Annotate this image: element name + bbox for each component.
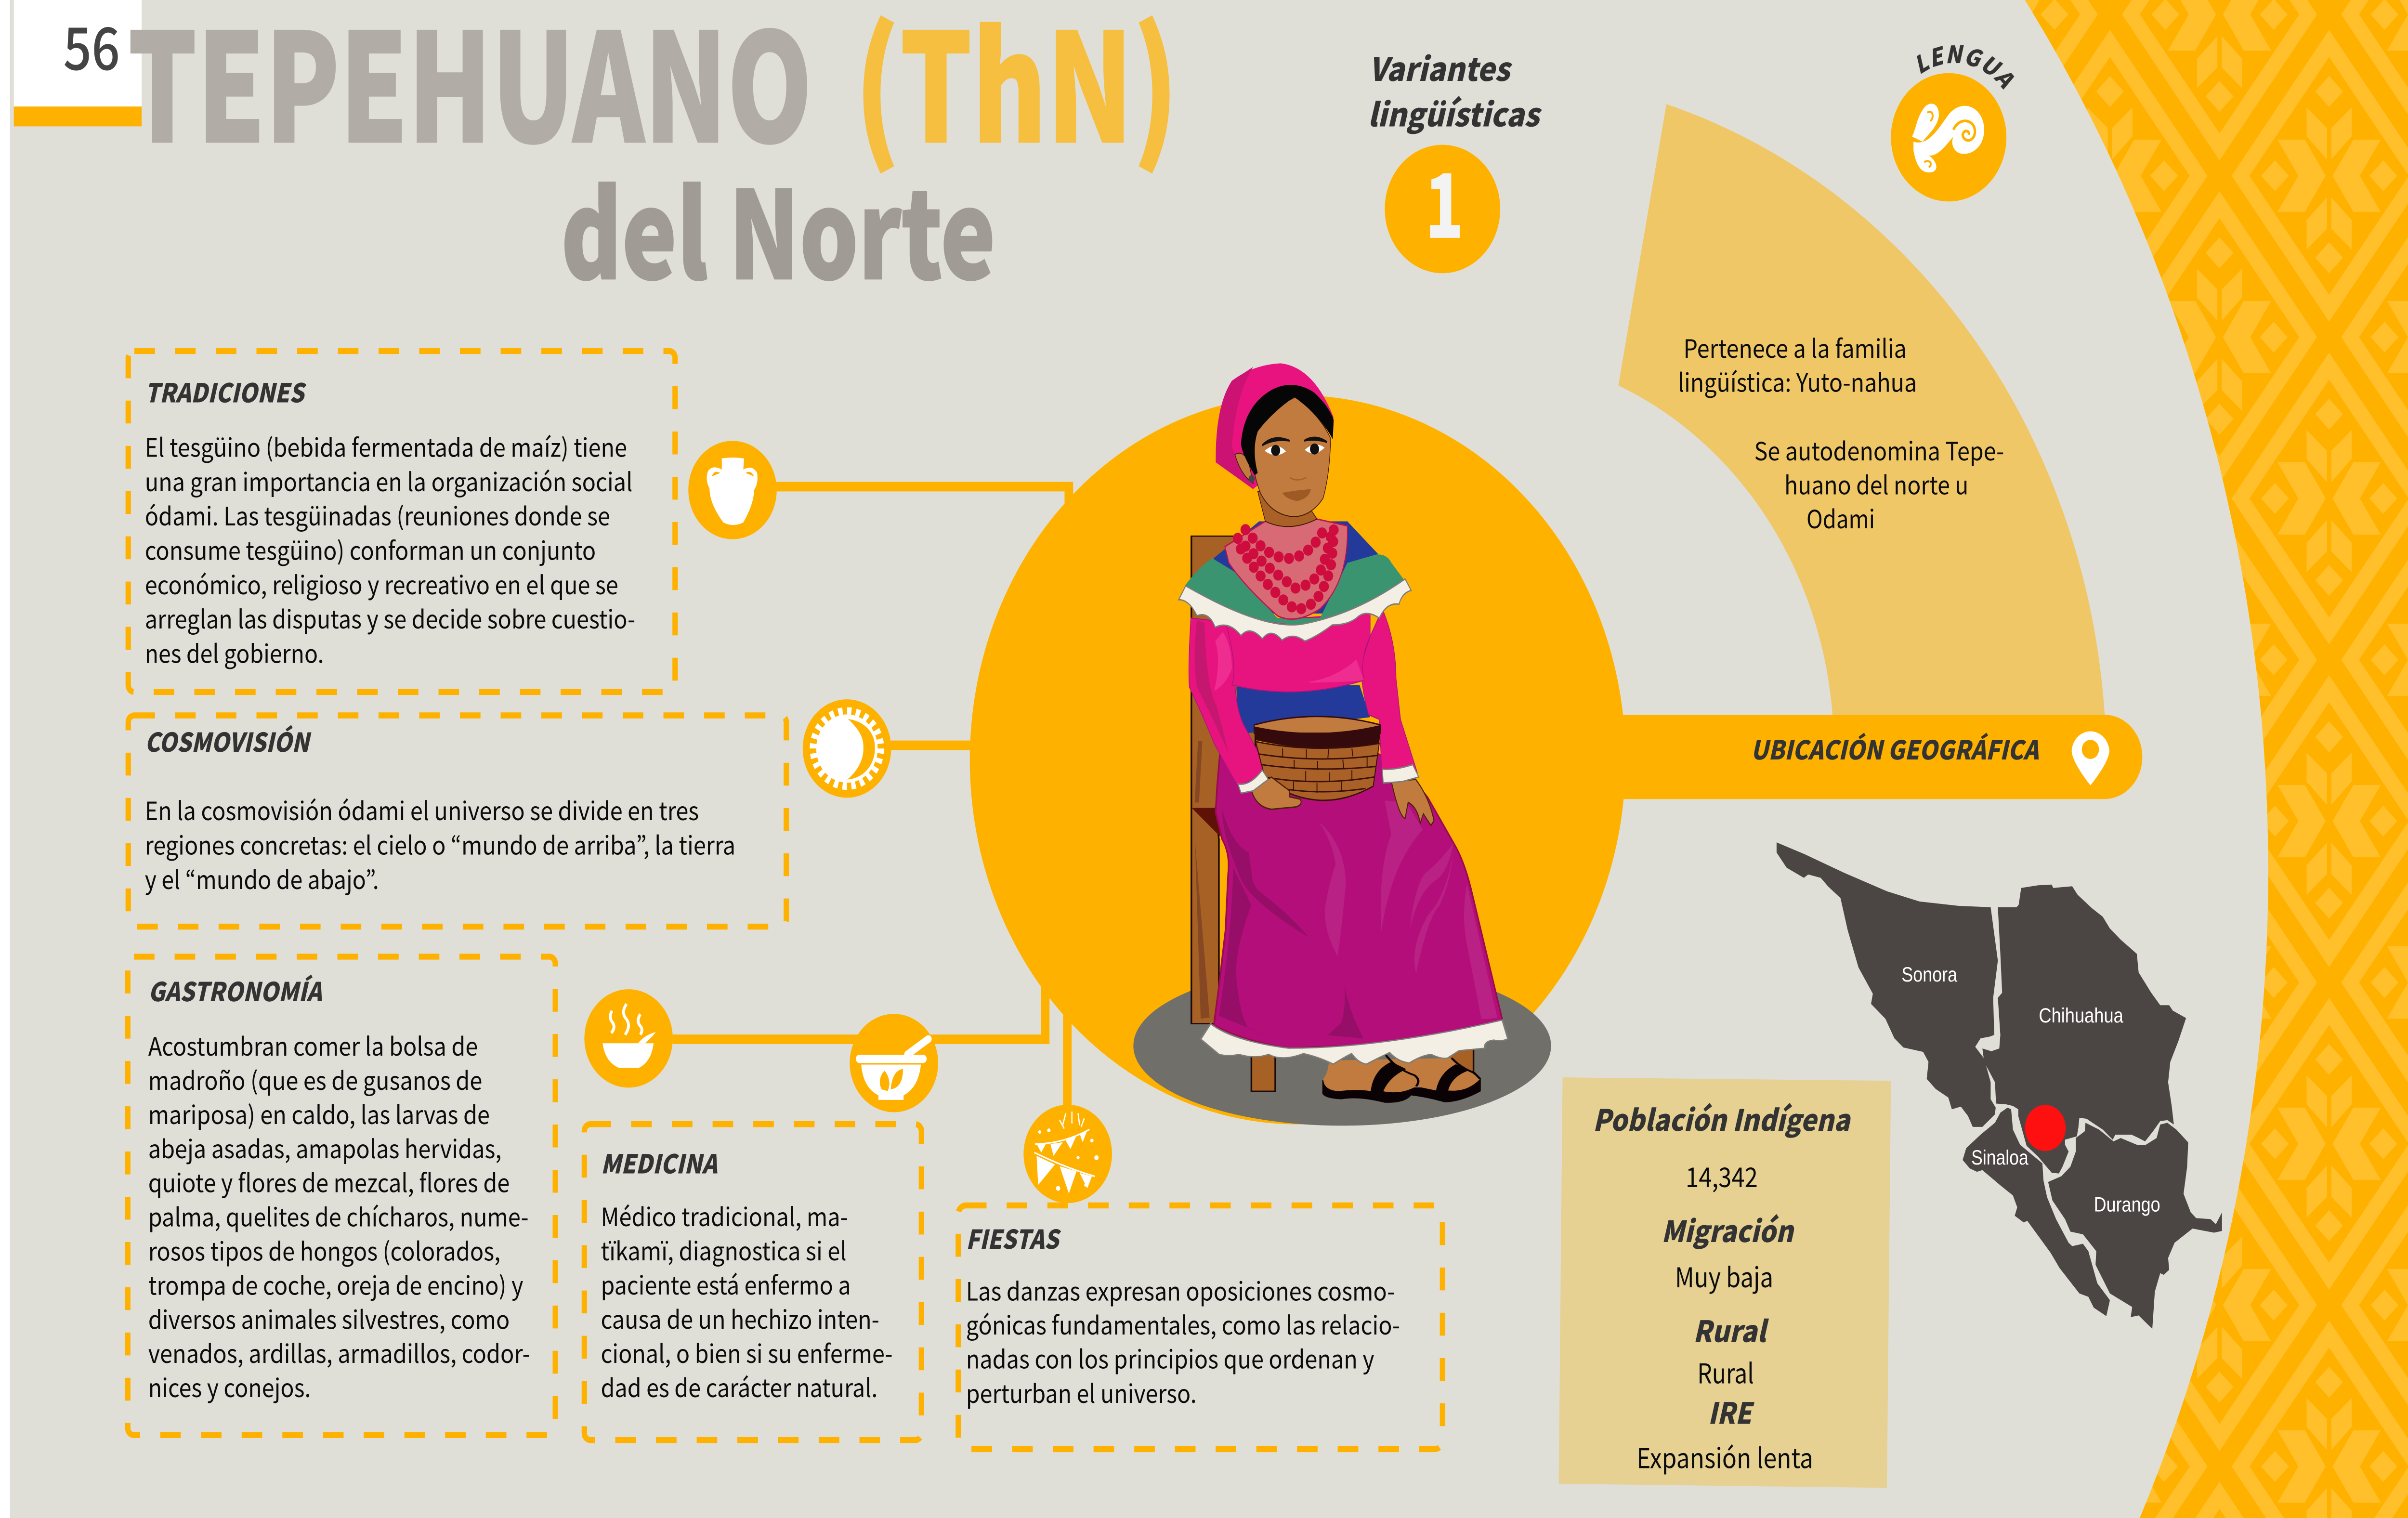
icon: fiestas (1023, 1105, 1112, 1203)
panel: población data: Muy baja (1675, 1256, 1773, 1296)
panel: gastronomía (128, 956, 555, 1435)
text block: gastronomía: Acostumbran comer la bolsa de (148, 1027, 478, 1063)
text block: medicina: Médico tradicional, ma- (601, 1197, 848, 1234)
text block: gastronomía: nices y conejos. (148, 1368, 311, 1405)
text block: cosmovisión: regiones concretas: el cielo o “mundo de arriba”, la tierra (145, 825, 735, 862)
language fan panel: Pertenece a la familia (1684, 329, 1907, 366)
illustration: seated woman (1133, 363, 1551, 1125)
map of northern Mexico: Sinaloa (1971, 1146, 2028, 1169)
text block: tradiciones: El tesgüino (bebida fermentada de maíz) tiene (145, 428, 627, 464)
sleeves and blouse (1189, 618, 1269, 786)
feet and sandals (1322, 1054, 1481, 1103)
bar: ubicación geográfica (1612, 715, 2142, 799)
panel: población data: 14,342 (1686, 1155, 1758, 1195)
heading: gastronomía: GASTRONOMÍA (148, 971, 322, 1009)
panel: fiestas (958, 1205, 1442, 1449)
beaded necklaces (1238, 523, 1334, 610)
text block: gastronomía: rosos tipos de hongos (colorados, (148, 1232, 500, 1268)
map state: Sonora (1777, 842, 1998, 1127)
text block: gastronomía (148, 1027, 530, 1405)
location marker (2025, 1105, 2066, 1151)
title: del Norte (561, 139, 995, 314)
map state: Sinaloa (1963, 1108, 2110, 1316)
text block: medicina: paciente está enfermo a (601, 1266, 851, 1302)
variantes lingüísticas: lingüísticas (1368, 90, 1542, 136)
panel: población data: Rural (1693, 1308, 1769, 1350)
text block: gastronomía: quiote y flores de mezcal, flores de (148, 1164, 510, 1200)
shawl (1185, 554, 1405, 625)
text block: tradiciones: una gran importancia en la organización social (145, 462, 632, 499)
central orange circle (970, 395, 1625, 1125)
text block: tradiciones: nes del gobierno. (145, 634, 324, 670)
mouth (1282, 489, 1311, 501)
language fan panel: Se autodenomina Tepe- (1754, 432, 2004, 468)
skirt (1201, 746, 1508, 1064)
page number tab: 56 (63, 2, 120, 87)
icon: medicina mortar (850, 1014, 938, 1112)
panel: tradiciones (128, 351, 675, 692)
text block: fiestas: Las danzas expresan oposiciones cosmo- (966, 1272, 1395, 1308)
text block: medicina: dad es de carácter natural. (601, 1368, 877, 1405)
text block: gastronomía: mariposa) en caldo, las larvas de (148, 1095, 490, 1132)
title (128, 0, 1178, 314)
icon: gastronomía bowl (584, 989, 673, 1087)
language fan panel (1618, 104, 2105, 717)
heading: fiestas: FIESTAS (966, 1218, 1061, 1256)
skirt hem (1201, 1020, 1508, 1064)
text block: medicina: tïkamï, diagnostica si el (601, 1231, 847, 1268)
scarf (1216, 363, 1334, 489)
text block: gastronomía: abeja asadas, amapolas hervidas, (148, 1129, 501, 1166)
panel: cosmovisión (128, 715, 786, 927)
text block: tradiciones (145, 428, 635, 670)
language fan panel: Odami (1806, 499, 1875, 536)
hands and cuffs (1252, 777, 1301, 809)
text block: gastronomía: palma, quelites de chícharos, nume- (148, 1198, 529, 1234)
panel: población data (1559, 1077, 1891, 1488)
panel: medicina (584, 1124, 921, 1440)
text block: gastronomía: madroño (que es de gusanos de (148, 1061, 482, 1098)
page number tab (14, 0, 142, 126)
eyes and brows (1265, 445, 1324, 455)
blue shirt (1214, 521, 1382, 733)
heading: tradiciones: TRADICIONES (145, 372, 307, 410)
upper body (1178, 363, 1434, 825)
heading: medicina: MEDICINA (601, 1143, 718, 1181)
shawl fringe (1178, 579, 1411, 641)
map of northern Mexico (1777, 842, 2222, 1329)
text block: gastronomía: venados, ardillas, armadillos, codor- (148, 1334, 530, 1371)
panel: población data: IRE (1708, 1390, 1755, 1432)
text block: gastronomía: diversos animales silvestres, como (148, 1300, 510, 1336)
bar: ubicación geográfica: UBICACIÓN GEOGRÁFICA (1751, 729, 2039, 767)
map of northern Mexico: Sonora (1901, 963, 1958, 986)
text block: tradiciones: arreglan las disputas y se decide sobre cuestio- (145, 600, 635, 636)
basket (1254, 717, 1381, 733)
text block: medicina: cional, o bien si su enferme- (601, 1334, 893, 1371)
variantes lingüísticas (1368, 44, 1542, 273)
icon: lengua: LENGUA (1917, 45, 2014, 90)
necklace bib (1225, 519, 1348, 619)
map state: Chihuahua (1982, 885, 2186, 1174)
map of northern Mexico: Durango (2094, 1192, 2160, 1216)
text block: tradiciones: económico, religioso y recreativo en el que se (145, 565, 618, 602)
text block: cosmovisión: En la cosmovisión ódami el universo se divide en tres (145, 791, 699, 828)
text block: tradiciones: ódami. Las tesgüinadas (reuniones donde se (145, 497, 610, 533)
panel: población data: Población Indígena (1593, 1097, 1852, 1139)
map state: Durango (2048, 1123, 2222, 1329)
text block: medicina (601, 1197, 893, 1405)
panel: población data: Migración (1662, 1208, 1795, 1251)
icon: lengua (1891, 45, 2014, 201)
hair (1241, 385, 1334, 475)
panel: población data: Expansión lenta (1636, 1436, 1813, 1476)
heading: cosmovisión: COSMOVISIÓN (145, 721, 312, 759)
panel: población data: Rural (1697, 1351, 1754, 1391)
variantes lingüísticas: 1 (1425, 135, 1464, 263)
white left strip (0, 0, 10, 1518)
face (1252, 397, 1331, 517)
text block: cosmovisión (145, 791, 735, 897)
text block: cosmovisión: y el “mundo de abajo”. (145, 860, 379, 897)
text block: medicina: causa de un hechizo inten- (601, 1300, 879, 1336)
text block: fiestas: gónicas fundamentales, como las relacio- (966, 1306, 1400, 1342)
text block: gastronomía: trompa de coche, oreja de encino) y (148, 1266, 523, 1302)
icon: cosmovisión sun and moon (803, 699, 891, 798)
connector lines (673, 486, 1069, 1110)
language fan panel: huano del norte u (1784, 465, 1968, 502)
neck (1258, 491, 1317, 526)
text block: fiestas: nadas con los principios que ordenan y (966, 1340, 1374, 1376)
text block: fiestas: perturban el universo. (966, 1374, 1197, 1411)
map of northern Mexico: Chihuahua (2039, 1004, 2123, 1027)
text block: tradiciones: consume tesgüino) conforman un conjunto (145, 531, 596, 567)
language fan panel: lingüística: Yuto-nahua (1678, 363, 1917, 399)
icon: tradiciones jar (688, 441, 777, 539)
text block: fiestas (966, 1272, 1400, 1411)
chair (1191, 536, 1474, 1091)
variantes lingüísticas: Variantes (1369, 44, 1513, 91)
floor shadow (1133, 966, 1551, 1125)
